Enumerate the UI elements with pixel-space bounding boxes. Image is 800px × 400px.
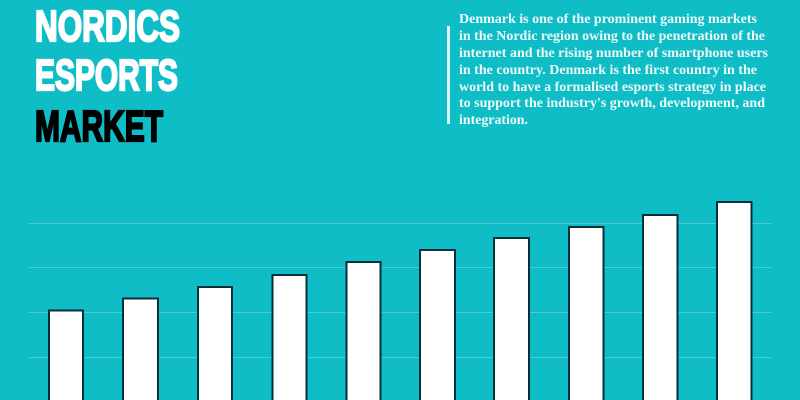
description text: integration. <box>459 113 528 128</box>
title <box>35 3 180 151</box>
description text: in the Nordic region owing to the penetration of the <box>459 29 765 44</box>
title: MARKET <box>35 103 163 151</box>
bar chart <box>29 202 771 400</box>
accent rule beside description <box>447 26 450 124</box>
description text: internet and the rising number of smartphone users <box>459 46 769 61</box>
description text: in the country. Denmark is the first country in the <box>459 63 757 78</box>
description text <box>459 12 769 128</box>
description text: Denmark is one of the prominent gaming markets <box>459 12 758 27</box>
title: NORDICS <box>35 3 180 51</box>
description text: to support the industry's growth, development, and <box>459 96 765 111</box>
title: ESPORTS <box>35 52 178 100</box>
description text: world to have a formalised esports strategy in place <box>459 80 766 95</box>
